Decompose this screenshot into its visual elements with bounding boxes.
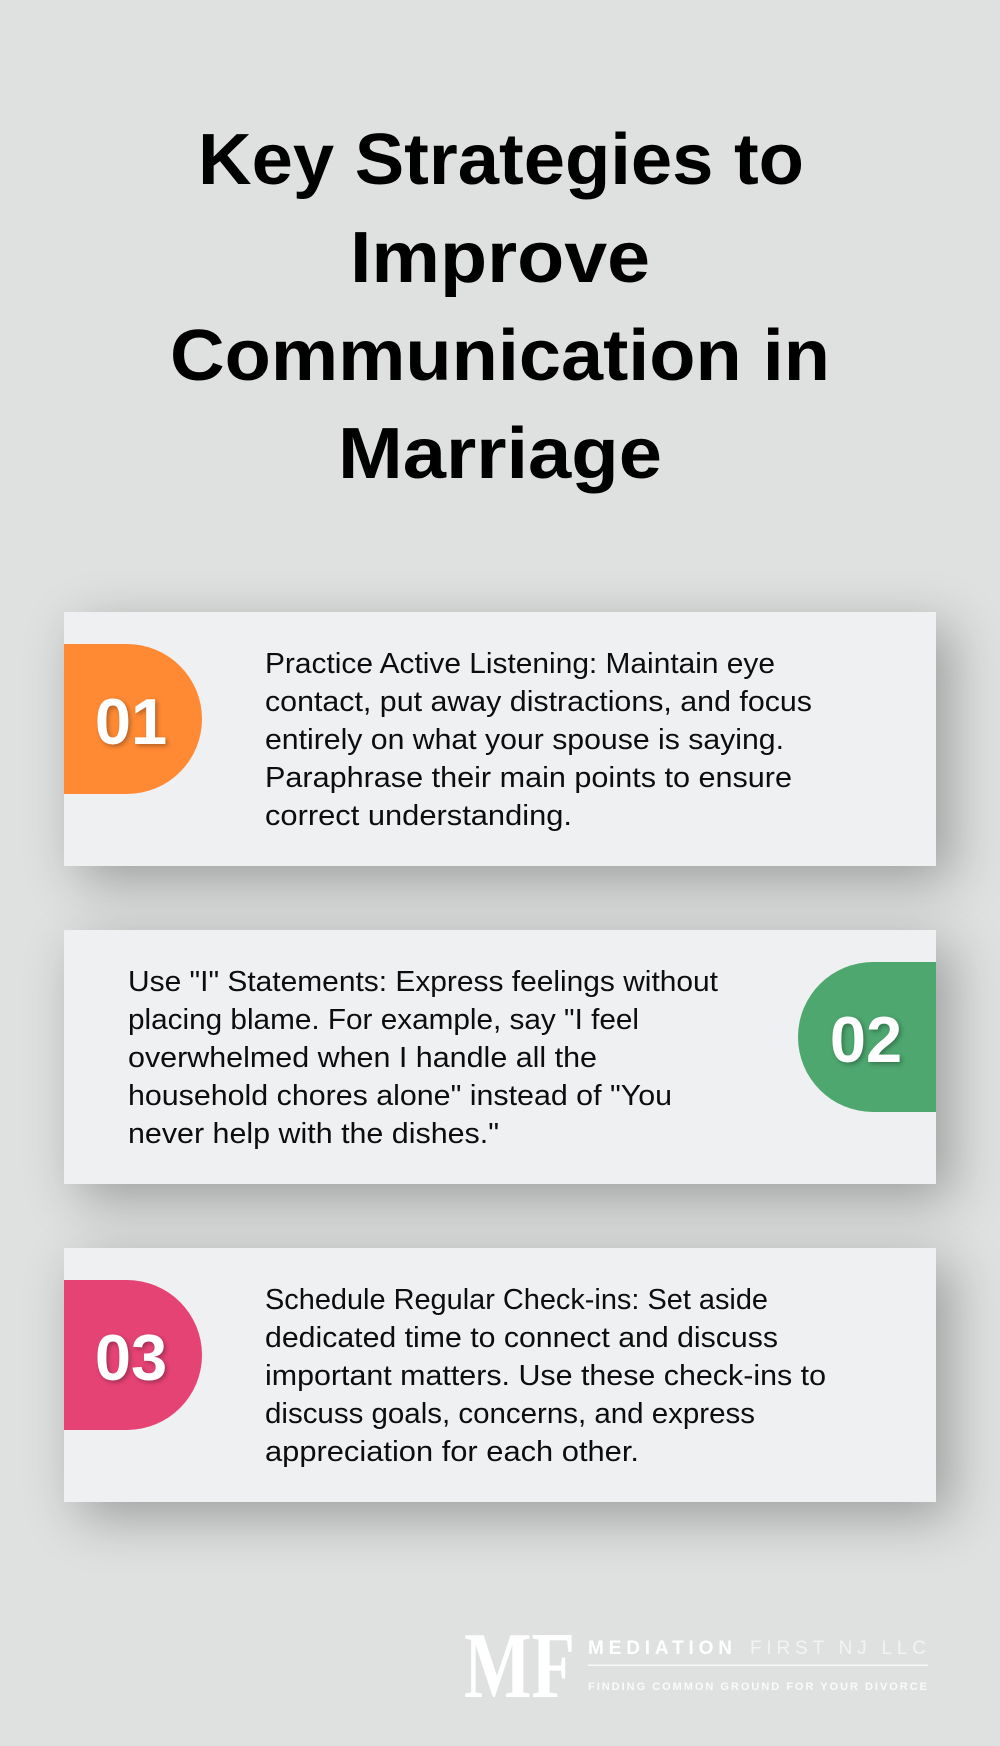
title: Improve [350,218,650,298]
title: Communication in [170,316,830,396]
text block: schedule regular check-ins: dedicated time to connect and discuss [265,1322,778,1354]
logo: Mediation First NJ LLC [464,1625,928,1705]
title: Key Strategies to [198,120,804,200]
badge: 03: 03 [95,1321,167,1394]
title: Marriage [338,414,662,494]
text block: practice active listening: Practice Active Listening: Maintain eye [265,648,775,680]
text block: practice active listening: entirely on what your spouse is saying. [265,724,784,756]
text block: schedule regular check-ins: appreciation for each other. [265,1436,639,1468]
logo tagline: FINDING COMMON GROUND FOR YOUR DIVORCE [588,1681,927,1693]
text block: use I statements: placing blame. For example, say "I feel [128,1004,639,1036]
text block: practice active listening: Paraphrase their main points to ensure [265,762,792,794]
badge: 02: 02 [830,1003,902,1076]
badge: 01 [64,644,202,794]
panel: step 02 I statements [64,930,936,1184]
text block: use I statements [128,966,718,1150]
badge: 02 [798,962,936,1112]
panel: step 03 regular check-ins [64,1248,936,1502]
text block: schedule regular check-ins: discuss goals, concerns, and express [265,1398,755,1430]
logo name: company [588,1638,926,1659]
text block: schedule regular check-ins: important matters. Use these check-ins to [265,1360,826,1392]
text block: schedule regular check-ins: Schedule Regular Check-ins: Set aside [265,1284,768,1316]
title [170,120,830,494]
text block: practice active listening [265,648,812,832]
text block: use I statements: household chores alone" instead of "You [128,1080,672,1112]
panel: step 01 active listening [64,612,936,866]
badge: 03 [64,1280,202,1430]
text block: use I statements: never help with the dishes." [128,1118,499,1150]
text block: practice active listening: contact, put away distractions, and focus [265,686,812,718]
logo name: company: MEDIATION [588,1638,732,1659]
text block: use I statements: Use "I" Statements: Express feelings without [128,966,718,998]
text block: schedule regular check-ins [265,1284,826,1468]
text block: use I statements: overwhelmed when I handle all the [128,1042,597,1074]
logo name: company: FIRST NJ LLC [750,1638,926,1659]
text block: practice active listening: correct understanding. [265,800,572,832]
badge: 01: 01 [95,685,167,758]
